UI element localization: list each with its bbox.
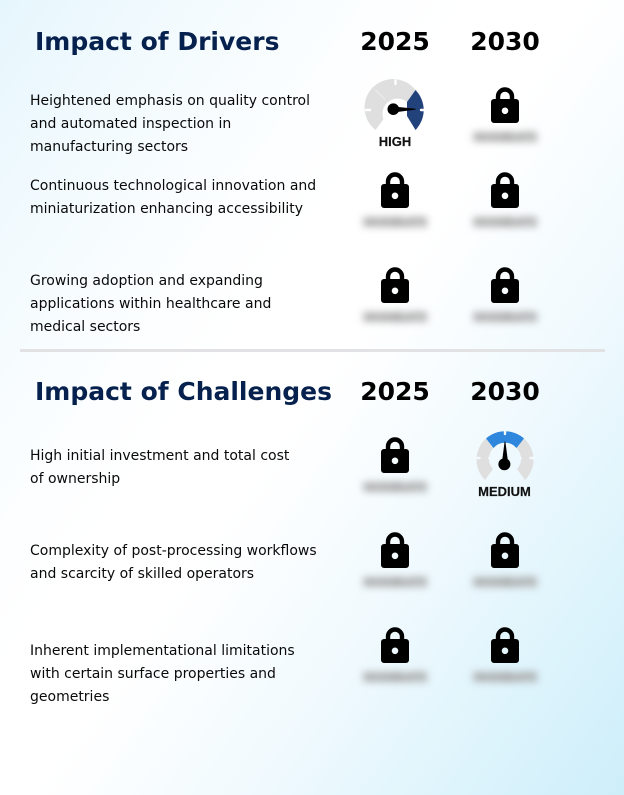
text: challenge 1 [30,448,290,487]
text: challenge 3: with certain surface properties and [30,666,276,682]
locked rating: driver 3, 2025: MODERATE [363,313,427,324]
locked rating: driver 3, 2025 [359,267,431,326]
heading: impact of drivers: Impact of Drivers [35,27,279,56]
panel: impact of drivers [30,27,541,335]
locked rating: challenge 1, 2025: MODERATE [363,483,427,494]
text: driver 1: Heightened emphasis on quality control [30,93,310,109]
year heading 2025: 2025 [360,27,430,56]
text: challenge 2 [30,543,317,582]
locked rating: driver 3, 2030 [469,267,541,326]
text: driver 2: miniaturization enhancing accessibility [30,201,303,217]
text: driver 3: medical sectors [30,319,140,335]
locked rating: challenge 2, 2030 [469,532,541,592]
locked rating: challenge 3, 2030 [469,627,541,686]
text: driver 2 [30,178,316,217]
text: challenge 2: Complexity of post-processing workflows [30,543,317,559]
text: driver 3 [30,273,271,335]
text: challenge 2: and scarcity of skilled operators [30,566,254,582]
panel: impact of challenges [30,377,541,705]
locked rating: challenge 3, 2025: MODERATE [363,673,427,684]
year heading 2030: 2030 [470,377,540,406]
text: driver 1: and automated inspection in [30,116,231,132]
text: challenge 3: geometries [30,689,109,705]
locked rating: challenge 3, 2030: MODERATE [473,673,537,684]
heading: impact of challenges: Impact of Challenges [35,377,332,406]
text: driver 2: Continuous technological innovation and [30,178,316,194]
locked rating: challenge 3, 2025 [359,627,431,686]
text: driver 3: applications within healthcare and [30,296,271,312]
year heading 2030: 2030 [470,27,540,56]
locked rating: challenge 2, 2025: MODERATE [363,578,427,589]
locked rating: driver 1, 2030 [469,87,541,146]
gauge: medium, 2030 [476,431,534,499]
locked rating: driver 2, 2025 [359,172,431,232]
gauge: high, 2025: HIGH [379,134,411,149]
text: challenge 3: Inherent implementational limitations [30,643,295,659]
year heading 2025: 2025 [360,377,430,406]
locked rating: challenge 2, 2025 [359,532,431,592]
locked rating: driver 3, 2030: MODERATE [473,313,537,324]
locked rating: challenge 2, 2030: MODERATE [473,578,537,589]
locked rating: driver 2, 2030: MODERATE [473,218,537,229]
text: challenge 1: of ownership [30,471,120,487]
locked rating: driver 2, 2025: MODERATE [363,218,427,229]
gauge: high, 2025 [364,79,424,149]
locked rating: challenge 1, 2025 [359,437,431,496]
text: challenge 3 [30,643,295,705]
text: driver 1: manufacturing sectors [30,139,188,155]
locked rating: driver 2, 2030 [469,172,541,232]
gauge: medium, 2030: MEDIUM [478,484,531,499]
text: driver 3: Growing adoption and expanding [30,273,263,289]
text: challenge 1: High initial investment and total cost [30,448,289,464]
locked rating: driver 1, 2030: MODERATE [473,133,537,144]
text: driver 1 [30,93,310,155]
